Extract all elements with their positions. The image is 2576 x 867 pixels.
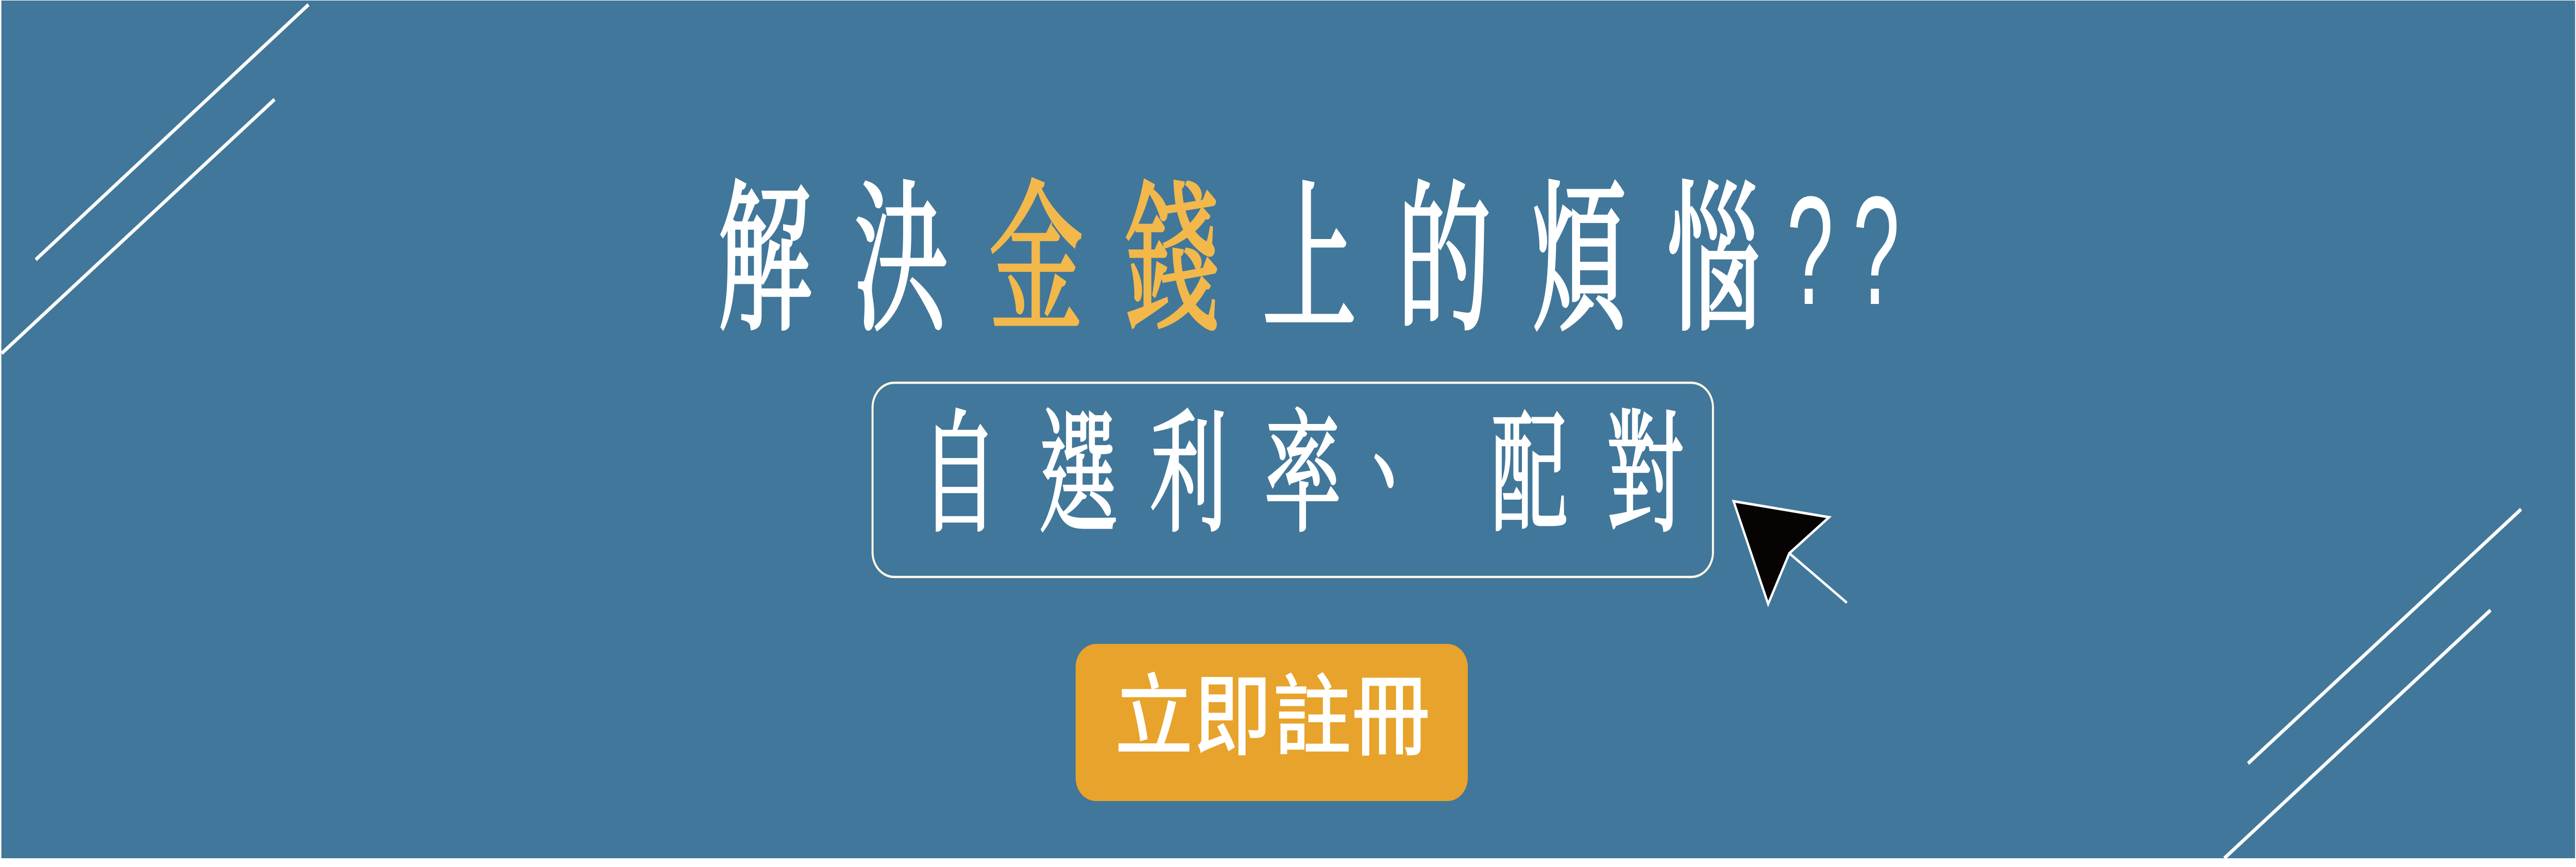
subtitle text: 自選利率、配對: [921, 402, 1684, 549]
title: [718, 164, 1900, 352]
title text: white end: 上的煩惱: [1262, 172, 1761, 352]
decorative lines: top left: [2, 5, 309, 353]
cursor tail: [1789, 553, 1847, 603]
subtitle box: [873, 383, 1713, 577]
title text: highlighted word: 金錢: [989, 172, 1219, 352]
title question marks: ??: [1787, 164, 1900, 337]
button label: 立即註冊: [1115, 668, 1430, 767]
subtitle outline: [873, 383, 1713, 577]
button: register now: [1076, 644, 1468, 801]
decorative lines: bottom right: [2224, 509, 2521, 858]
title text: white start: 解決: [718, 172, 948, 352]
button background: [1076, 644, 1468, 801]
cursor head: [1734, 501, 1829, 604]
icon: mouse cursor arrow: [1734, 501, 1847, 604]
